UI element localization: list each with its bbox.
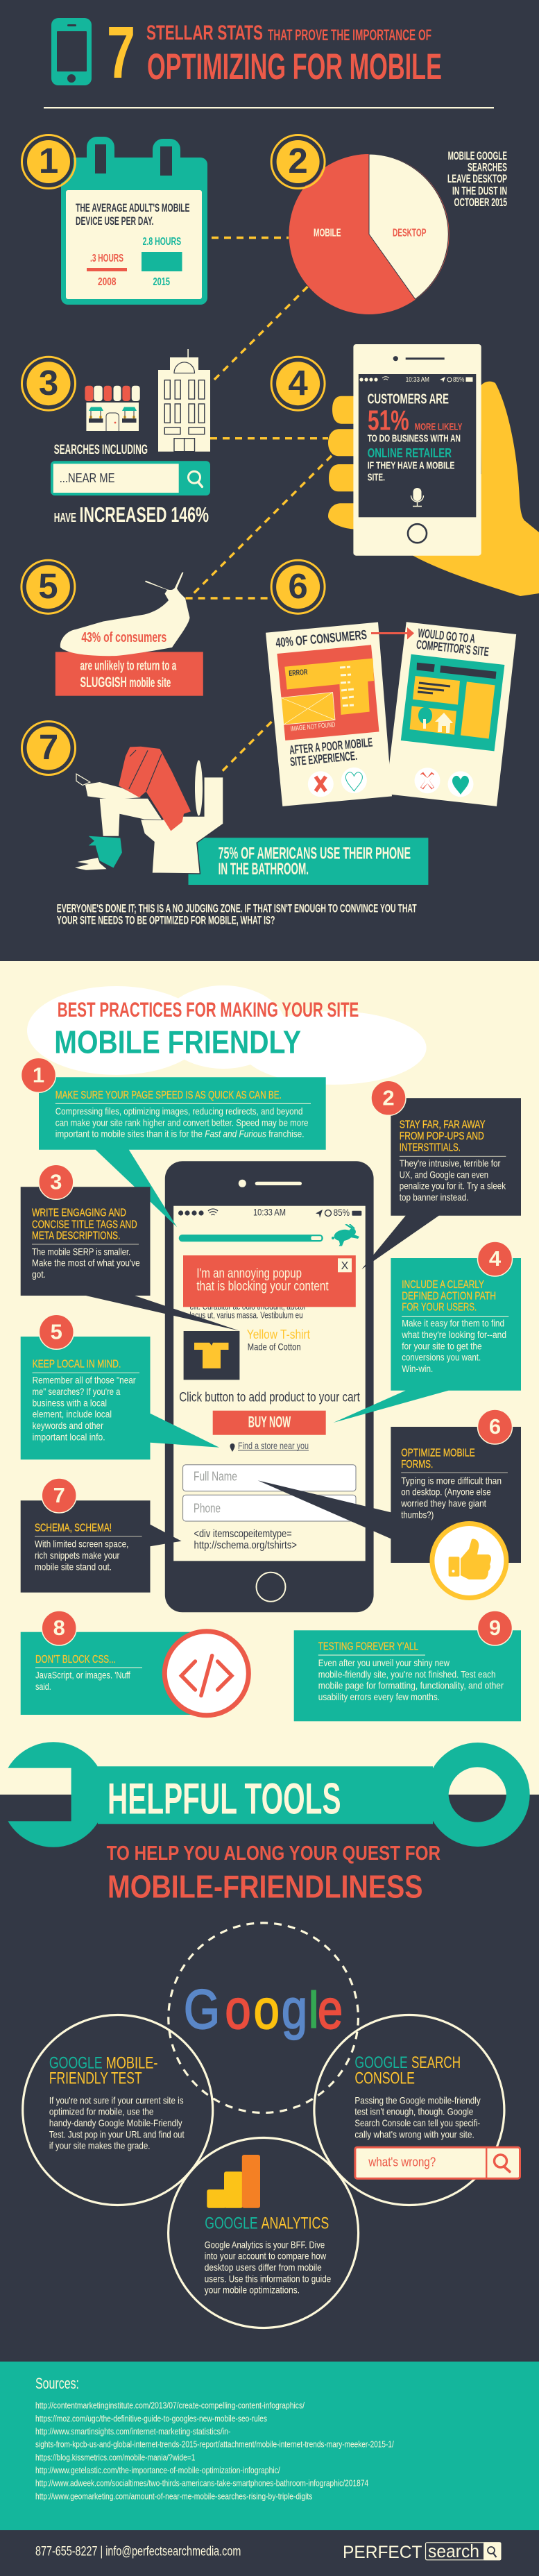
panel: google search console: SEARCH: [411, 2053, 461, 2072]
panel: tip 2 pop-ups: INTERSTITIALS.: [400, 1142, 461, 1153]
panel: stat 6 bad mobile site card: ERROR: [289, 668, 308, 678]
panel: sources: http://www.getelastic.com/the-importance-of-mobile-optimization-infographic/: [35, 2465, 280, 2475]
panel: tip 1 page speed: can make your site rank higher and convert better. Speed may be more: [55, 1117, 309, 1128]
panel: google analytics: ANALYTICS: [262, 2214, 329, 2233]
heading: quest for mobile-friendliness: TO HELP YOU ALONG YOUR QUEST FOR: [107, 1842, 440, 1865]
panel: tip 4 action path: what they're looking for--and: [401, 1329, 506, 1340]
panel: sources: sights-from-kpcb-us-and-global-internet-trends-2015-report/attachment/mobile-internet-trends-mary-meeker-2015-1/: [35, 2439, 394, 2450]
panel: stat 6 bad mobile site card: 40% OF CONSUMERS: [275, 628, 368, 651]
panel: tip 6 mobile forms: OPTIMIZE MOBILE: [401, 1448, 475, 1459]
panel: tip 6 mobile forms: thumbs?): [401, 1509, 434, 1520]
logo: google wordmark: o: [254, 1978, 280, 2040]
panel: stat 7 bathroom box: 75% OF AMERICANS USE THEIR PHONE: [219, 845, 411, 863]
panel: tip 1 page speed: [21, 1058, 326, 1227]
panel: sources: http://www.adweek.com/socialtimes/two-thirds-americans-take-smartphones-bathroom-infographic/201874: [35, 2478, 368, 2489]
call to action: buy now: Click button to add product to your cart: [179, 1390, 360, 1405]
panel: tip 5 keep local: Remember all of those "near: [33, 1375, 136, 1386]
panel: stat 5 sluggish box: [55, 652, 203, 696]
text: mobile searches caption: SEARCHES: [468, 162, 507, 174]
heading: best practices with cloud: [27, 985, 427, 1085]
form: name and phone inputs: Phone: [194, 1501, 221, 1515]
logo: perfect search: search: [428, 2541, 479, 2561]
chart: pie mobile vs desktop: DESKTOP: [393, 228, 427, 239]
search box: what's wrong: [355, 2147, 520, 2179]
panel: tip 6 mobile forms: [258, 1409, 521, 1563]
badge: number 6: [271, 560, 325, 613]
panel: stat 7 bathroom box: IN THE BATHROOM.: [219, 860, 309, 879]
panel: tip 4 action path: [334, 1242, 521, 1423]
panel: tip 5 keep local: important local info.: [33, 1431, 105, 1442]
chart: pie mobile vs desktop: [289, 154, 450, 314]
panel: stat 4 phone: CUSTOMERS ARE: [368, 392, 449, 407]
panel: tip 3 title tags: [21, 1164, 239, 1331]
panel: tip 6 mobile forms: 6: [489, 1414, 501, 1439]
banner: wrench helpful tools: [0, 1742, 530, 1847]
panel: google search console: CONSOLE: [354, 2069, 415, 2087]
panel: phone mockup: 10:33 AM: [253, 1207, 286, 1218]
panel: tip 3 title tags: CONCISE TITLE TAGS AND: [32, 1219, 137, 1230]
product: yellow t-shirt: Made of Cotton: [248, 1341, 301, 1352]
panel: stat 6 competitor site card: WOULD GO TO A: [418, 626, 476, 646]
panel: tip 8 don't block css: JavaScript, or images. 'Nuff: [35, 1670, 130, 1681]
text: mobile searches caption: [447, 150, 507, 209]
product: yellow t-shirt: Yellow T-shirt: [247, 1328, 310, 1341]
panel: tip 9 testing: [294, 1611, 521, 1721]
panel: stat 1 calendar: 2008: [98, 276, 117, 288]
panel: google mobile-friendly test: GOOGLE: [49, 2053, 103, 2072]
icon: person on toilet: [75, 747, 223, 874]
badge: number 5: 5: [38, 566, 58, 606]
text: mobile searches caption: IN THE DUST IN: [452, 185, 507, 197]
heading: best practices with cloud: BEST PRACTICES FOR MAKING YOUR SITE: [58, 999, 359, 1022]
text: searches including near me: HAVE: [54, 511, 76, 525]
panel: tip 3 title tags: The mobile SERP is smaller.: [32, 1246, 130, 1257]
panel: google analytics: users. Use this information to guide: [205, 2273, 331, 2284]
heading: best practices with cloud: MOBILE FRIENDLY: [54, 1024, 301, 1060]
panel: tip 7 schema: With limited screen space,: [35, 1539, 128, 1550]
panel: tip 5 keep local: [21, 1314, 219, 1459]
panel: tip 3 title tags: got.: [32, 1269, 46, 1280]
badge: number 7: 7: [39, 727, 58, 767]
panel: google analytics: desktop users differ from mobile: [205, 2262, 322, 2273]
text: no judging zone: [57, 902, 417, 926]
panel: stat 4 phone: IF THEY HAVE A MOBILE: [368, 461, 455, 472]
logo: google wordmark: [184, 1978, 343, 2040]
panel: stat 6 competitor site card: [386, 622, 516, 806]
panel: tip 3 title tags: META DESCRIPTIONS.: [32, 1230, 120, 1242]
title: 7 stellar stats: THAT PROVE THE IMPORTANCE OF: [268, 26, 431, 44]
panel: stat 4 phone: 51%: [368, 404, 409, 436]
panel: stat 5 sluggish box: SLUGGISH: [80, 675, 127, 690]
panel: google search console: cally what's wrong with your site.: [354, 2128, 474, 2139]
panel: stat 6 bad mobile site card: [266, 622, 392, 806]
call to action: buy now: BUY NOW: [248, 1414, 291, 1431]
panel: tip 3 title tags: WRITE ENGAGING AND: [32, 1208, 126, 1219]
icon: storefront: [85, 386, 140, 431]
panel: tip 7 schema: SCHEMA, SCHEMA!: [35, 1523, 112, 1534]
panel: stat 5 sluggish box: are unlikely to return to a: [80, 659, 176, 673]
panel: tip 3 title tags: Make the most of what you've: [32, 1257, 140, 1269]
title: 7 stellar stats: [107, 12, 442, 94]
panel: google mobile-friendly test: FRIENDLY TEST: [49, 2069, 142, 2088]
panel: stat 4 phone: ONLINE RETAILER: [368, 446, 452, 460]
panel: stat 4 phone: MORE LIKELY: [415, 421, 463, 432]
panel: tip 7 schema: 7: [53, 1483, 65, 1507]
badge: number 6: 6: [288, 566, 308, 606]
panel: google search console: Search Console can tell you specifi-: [354, 2117, 480, 2128]
panel: stat 6 bad mobile site card: IMAGE NOT FOUND: [290, 721, 336, 733]
popup: annoying popup: I'm an annoying popup: [196, 1266, 302, 1281]
panel: tip 5 keep local: KEEP LOCAL IN MIND.: [33, 1358, 121, 1370]
badge: number 1: [22, 135, 75, 189]
panel: tip 1 page speed: important to mobile sites than it is for the Fast and Furious franchise.: [55, 1128, 305, 1139]
icon: snail: [60, 572, 190, 656]
panel: sources: [35, 2375, 394, 2501]
panel: google mobile-friendly test: optimized for mobile, use the: [49, 2106, 154, 2117]
panel: google search console: GOOGLE: [354, 2053, 408, 2072]
panel: tip 8 don't block css: 8: [53, 1616, 65, 1640]
diagram: dashed google circle: [169, 1923, 358, 2112]
form: name and phone inputs: [183, 1465, 356, 1521]
panel: stat 1 calendar: [61, 137, 207, 305]
panel: tip 4 action path: for your site to get the: [402, 1340, 482, 1351]
panel: stat 4 phone: [353, 344, 481, 556]
product: yellow t-shirt: [184, 1328, 310, 1380]
panel: tip 6 mobile forms: on desktop. (Anyone else: [401, 1486, 491, 1498]
panel: phone mockup: 85%: [334, 1207, 350, 1218]
form: name and phone inputs: Full Name: [194, 1470, 237, 1484]
panel: tip 2 pop-ups: penalize you for it. Try a sleek: [400, 1180, 506, 1192]
heading: quest for mobile-friendliness: [107, 1842, 440, 1904]
icon: running rabbit: [332, 1224, 359, 1246]
panel: google analytics: your mobile optimizations.: [205, 2285, 300, 2296]
text: clipped lorem copy: lacus ut, varius massa. Vestibulum eu: [190, 1311, 303, 1321]
text: searches including near me: [51, 443, 210, 527]
badge: number 2: 2: [288, 141, 308, 180]
panel: tip 9 testing: usability errors every few months.: [318, 1691, 440, 1702]
panel: tip 4 action path: FOR YOUR USERS.: [402, 1302, 477, 1314]
panel: tip 7 schema: [21, 1478, 182, 1593]
text: clipped lorem copy: elit. Curabitur ac odio tincidunt, auctor: [190, 1302, 306, 1312]
title: 7 stellar stats: STELLAR STATS: [146, 22, 263, 44]
panel: sources: Sources:: [35, 2375, 79, 2392]
panel: tip 9 testing: 9: [489, 1616, 501, 1640]
panel: tip 2 pop-ups: [361, 1081, 521, 1269]
panel: tip 5 keep local: business with a local: [33, 1397, 107, 1408]
logo: google wordmark: e: [318, 1978, 343, 2040]
badge: number 1: 1: [39, 141, 58, 180]
panel: google mobile-friendly test: handy-dandy Google Mobile-Friendly: [49, 2117, 182, 2128]
code: schema snippet: [194, 1528, 297, 1551]
panel: tip 5 keep local: keywords and other: [33, 1420, 103, 1431]
icon: office building: [158, 349, 210, 452]
badge: number 4: [271, 357, 325, 410]
icon: header phone: [51, 18, 92, 85]
panel: tip 2 pop-ups: STAY FAR, FAR AWAY: [400, 1119, 486, 1130]
panel: google analytics: [169, 2137, 359, 2328]
panel: tip 5 keep local: me" searches? If you're a: [33, 1386, 121, 1397]
arrow: consumers to competitor: [371, 627, 414, 640]
banner: wrench helpful tools: HELPFUL TOOLS: [108, 1774, 341, 1823]
link: find a store: [230, 1440, 309, 1452]
panel: google mobile-friendly test: MOBILE-: [106, 2053, 157, 2072]
panel: tip 6 mobile forms: Typing is more difficult than: [401, 1475, 502, 1486]
logo: google wordmark: g: [282, 1978, 307, 2040]
panel: stat 4 phone: 10:33 AM: [406, 376, 429, 384]
panel: google analytics: GOOGLE: [205, 2214, 258, 2233]
badge: number 3: 3: [39, 363, 58, 402]
panel: google analytics: Google Analytics is your BFF. Dive: [205, 2239, 325, 2250]
popup: annoying popup: X: [341, 1260, 349, 1272]
badge: number 7: [22, 722, 75, 774]
panel: google mobile-friendly test: if your site makes the grade.: [49, 2140, 151, 2151]
panel: tip 2 pop-ups: FROM POP-UPS AND: [400, 1130, 484, 1142]
panel: tip 8 don't block css: DON'T BLOCK CSS...: [35, 1654, 116, 1666]
code: schema snippet: <div itemscopeitemtype=: [194, 1528, 292, 1540]
call to action: buy now: [179, 1390, 360, 1435]
panel: stat 4 phone: 85%: [453, 376, 464, 384]
panel: phone mockup: [165, 1161, 374, 1612]
panel: tip 8 don't block css: said.: [35, 1681, 51, 1692]
badge: number 4: 4: [288, 363, 308, 402]
panel: tip 7 schema: rich snippets make your: [35, 1550, 120, 1561]
panel: stat 7 bathroom box: [189, 838, 428, 885]
footer: contact: 877-655-8227 | info@perfectsearchmedia.com: [35, 2545, 241, 2559]
panel: tip 9 testing: TESTING FOREVER Y'ALL: [318, 1641, 418, 1653]
logo: google wordmark: G: [184, 1978, 220, 2040]
icon: analytics bars: [207, 2155, 260, 2208]
icon: thumbs up: [432, 1524, 506, 1598]
panel: sources: https://moz.com/ugc/the-definitive-guide-to-googles-new-mobile-seo-rules: [35, 2413, 267, 2423]
panel: google search console: Passing the Google mobile-friendly: [354, 2094, 481, 2105]
chart: pie mobile vs desktop: MOBILE: [314, 228, 341, 239]
link: find a store: Find a store near you: [238, 1440, 309, 1451]
panel: stat 4 phone: SITE.: [368, 472, 385, 483]
panel: stat 6 bad mobile site card: SITE EXPERIENCE.: [289, 749, 358, 769]
badge: number 2: [271, 135, 325, 189]
title: 7 stellar stats: 7: [107, 12, 135, 94]
panel: tip 2 pop-ups: top banner instead.: [400, 1192, 468, 1203]
heading: quest for mobile-friendliness: MOBILE-FRIENDLINESS: [108, 1868, 423, 1904]
panel: sources: http://contentmarketinginstitute.com/2013/07/create-compelling-content-infographics/: [35, 2400, 305, 2411]
panel: stat 1 calendar: DEVICE USE PER DAY.: [76, 214, 154, 228]
panel: tip 4 action path: conversions you want.: [402, 1352, 481, 1363]
panel: stat 1 calendar: 2.8 HOURS: [143, 236, 181, 248]
panel: stat 1 calendar: .3 HOURS: [90, 253, 123, 264]
panel: tip 4 action path: 4: [489, 1246, 502, 1271]
panel: tip 9 testing: Even after you unveil your shiny new: [318, 1657, 450, 1668]
panel: google search console: test isn't enough, though. Google: [354, 2106, 473, 2117]
panel: google mobile-friendly test: If you're not sure if your current site is: [49, 2094, 184, 2105]
text: clipped lorem copy: [190, 1302, 306, 1321]
panel: tip 1 page speed: 1: [33, 1063, 44, 1087]
text: searches including near me: INCREASED 146%: [79, 502, 209, 527]
panel: stat 1 calendar: THE AVERAGE ADULT'S MOBILE: [76, 201, 190, 214]
badge: number 5: [22, 560, 75, 613]
panel: tip 9 testing: mobile-friendly site, you're not finished. Test each: [318, 1668, 495, 1679]
search box: what's wrong: what's wrong?: [368, 2155, 436, 2169]
panel: sources: http://www.geomarketing.com/amount-of-near-me-mobile-searches-rising-by-triple-digits: [35, 2491, 313, 2501]
panel: tip 3 title tags: 3: [50, 1170, 62, 1194]
text: mobile searches caption: OCTOBER 2015: [454, 196, 507, 209]
panel: google mobile-friendly test: Test. Just pop in your URL and find out: [49, 2128, 185, 2139]
panel: tip 6 mobile forms: worried they have giant: [400, 1498, 486, 1509]
panel: tip 4 action path: INCLUDE A CLEARLY: [402, 1279, 484, 1291]
panel: stat 1 calendar: 2015: [153, 276, 170, 288]
panel: google search console: [314, 2015, 520, 2205]
panel: tip 5 keep local: 5: [51, 1320, 62, 1344]
panel: tip 8 don't block css: [21, 1611, 248, 1715]
text: no judging zone: YOUR SITE NEEDS TO BE OPTIMIZED FOR MOBILE, WHAT IS?: [57, 913, 275, 926]
panel: stat 5 sluggish box: mobile site: [129, 676, 171, 690]
text: searches including near me: SEARCHES INCLUDING: [54, 443, 148, 457]
code: schema snippet: http://schema.org/tshirts>: [194, 1539, 297, 1551]
panel: tip 5 keep local: element, include local: [33, 1409, 112, 1420]
icon: snail: 43% of consumers: [81, 630, 166, 645]
panel: stat 4 phone: TO DO BUSINESS WITH AN: [368, 434, 461, 445]
panel: tip 4 action path: Make it easy for them to find: [402, 1318, 504, 1329]
icon: hand holding phone: [328, 382, 539, 596]
logo: perfect search: [343, 2541, 501, 2562]
panel: stat 6 bad mobile site card: AFTER A POOR MOBILE: [289, 736, 373, 757]
panel: google mobile-friendly test: [23, 2015, 213, 2205]
panel: tip 1 page speed: MAKE SURE YOUR PAGE SPEED IS AS QUICK AS CAN BE.: [55, 1090, 282, 1101]
panel: tip 2 pop-ups: They're intrusive, terrible for: [400, 1158, 501, 1169]
popup: annoying popup: that is blocking your content: [196, 1279, 329, 1294]
panel: tip 9 testing: mobile page for formatting, functionality, and other: [318, 1680, 504, 1691]
logo: perfect search: PERFECT: [343, 2543, 422, 2562]
panel: stat 6 competitor site card: COMPETITOR'S SITE: [416, 637, 490, 659]
panel: tip 1 page speed: Compressing files, optimizing images, reducing redirects, and beyond: [55, 1105, 303, 1117]
panel: sources: https://blog.kissmetrics.com/mobile-mania/?wide=1: [35, 2452, 195, 2462]
popup: annoying popup: [183, 1255, 356, 1307]
panel: tip 2 pop-ups: UX, and Google can even: [400, 1169, 488, 1180]
panel: tip 7 schema: mobile site stand out.: [35, 1561, 112, 1572]
panel: google analytics: into your account to compare how: [205, 2251, 327, 2262]
panel: tip 6 mobile forms: FORMS.: [401, 1459, 433, 1471]
panel: sources: http://www.smartinsights.com/internet-marketing-statistics/in-: [35, 2426, 230, 2437]
text: searches including near me: ...NEAR ME: [60, 471, 115, 485]
logo: google wordmark: o: [225, 1978, 251, 2040]
panel: tip 2 pop-ups: 2: [382, 1085, 395, 1110]
panel: tip 4 action path: Win-win.: [402, 1363, 433, 1374]
badge: number 3: [22, 357, 75, 410]
panel: tip 4 action path: DEFINED ACTION PATH: [402, 1290, 496, 1302]
